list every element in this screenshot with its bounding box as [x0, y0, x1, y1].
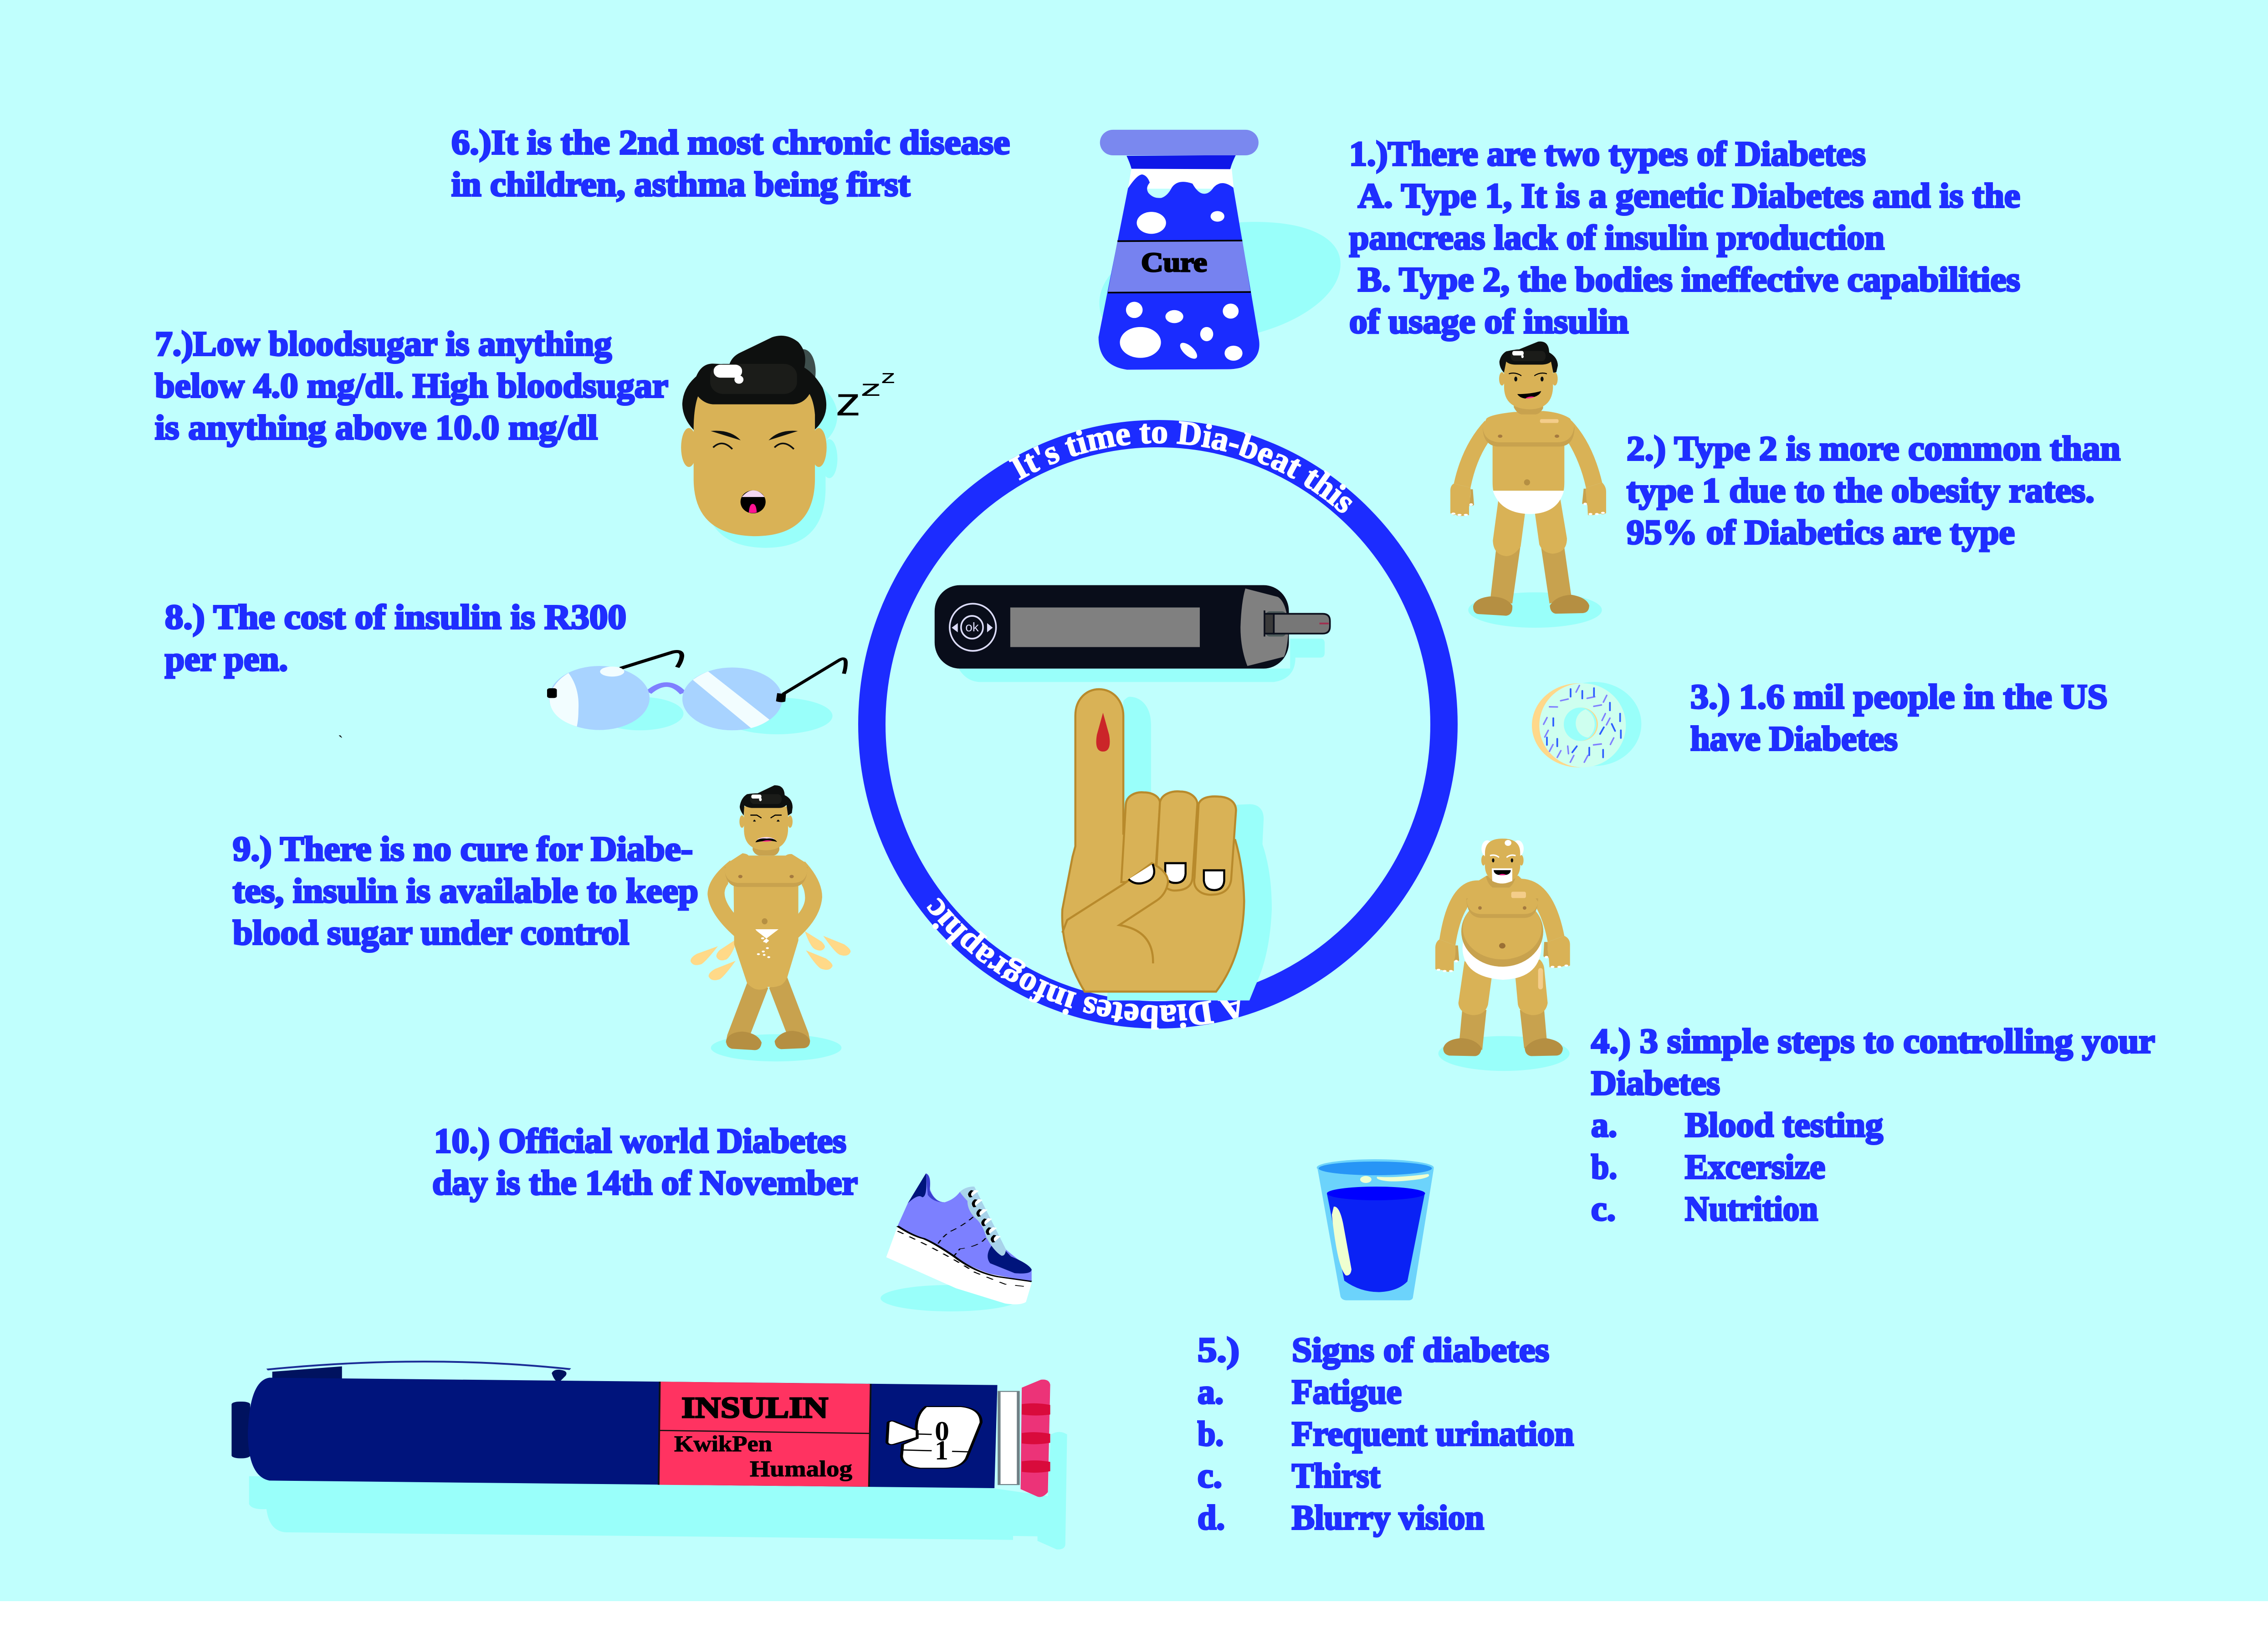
- text 5: signs of diabetes: d.: [1198, 1499, 1225, 1537]
- ring text: top: It's time to Dia-beat this: [1004, 413, 1363, 521]
- text 6: second most chronic disease: 6.)It is the 2nd most chronic disease: [451, 123, 1010, 162]
- text 2: type 2 is more common: type 1 due to the obesity rates.: [1627, 471, 2094, 510]
- text 5: signs of diabetes: c.: [1198, 1457, 1222, 1495]
- text 5: signs of diabetes: a.: [1198, 1373, 1224, 1411]
- text 1: two types of diabetes: 1.)There are two types of Diabetes: [1349, 135, 1866, 173]
- stray mark: `: [338, 733, 343, 750]
- text 1: two types of diabetes: pancreas lack of insulin production: [1349, 219, 1884, 257]
- text 9: no cure: 9.) There is no cure for Diabe-: [233, 830, 693, 868]
- text 6: second most chronic disease: in children, asthma being first: [451, 165, 910, 204]
- figure: man needing to urinate: [691, 785, 850, 1061]
- text 4: three simple steps: a.: [1591, 1106, 1617, 1144]
- label: zzz: z: [881, 366, 896, 387]
- figure: sleepy head: [681, 336, 837, 548]
- text 8: cost of insulin: [165, 598, 626, 678]
- text 4: three simple steps: 4.) 3 simple steps to controlling your: [1591, 1022, 2155, 1060]
- text 9: no cure: blood sugar under control: [233, 914, 629, 952]
- text 4: three simple steps: Excersize: [1685, 1148, 1825, 1186]
- text 6: second most chronic disease: [451, 123, 1010, 204]
- text 10: world diabetes day: [432, 1122, 858, 1202]
- label: zzz: [835, 366, 896, 424]
- text 5: signs of diabetes: Fatigue: [1292, 1373, 1402, 1411]
- pen labels: KwikPen: [674, 1431, 772, 1456]
- text 1: two types of diabetes: A. Type 1, It is a genetic Diabetes and is the: [1358, 177, 2020, 215]
- text 8: cost of insulin: 8.) The cost of insulin is R300: [165, 598, 626, 636]
- text 3: people in the US: 3.) 1.6 mil people in the US: [1690, 678, 2108, 716]
- text 3: people in the US: [1690, 678, 2108, 758]
- text 7: blood sugar levels: 7.)Low bloodsugar is anything: [155, 325, 612, 363]
- ring text: bottom: A Diabetes infographic: [915, 892, 1250, 1035]
- icon: sneaker: [881, 1173, 1032, 1311]
- text 3: people in the US: have Diabetes: [1690, 720, 1898, 758]
- label: zzz: z: [860, 375, 881, 401]
- icon: flask labelled Cure: [1099, 130, 1341, 370]
- text 5: signs of diabetes: Blurry vision: [1292, 1499, 1484, 1537]
- text 7: blood sugar levels: [155, 325, 668, 447]
- icon: doughnut: [1532, 682, 1641, 768]
- pen labels: INSULIN: [681, 1391, 828, 1424]
- text 8: cost of insulin: per pen.: [165, 640, 288, 678]
- text 9: no cure: [233, 830, 698, 952]
- text 5: signs of diabetes: Thirst: [1292, 1457, 1380, 1495]
- text 2: type 2 is more common: [1627, 430, 2120, 552]
- label: ok button: ok: [965, 620, 979, 634]
- icon: hand with blood drop: [1062, 689, 1272, 1000]
- text 1: two types of diabetes: of usage of insulin: [1349, 302, 1628, 341]
- text 4: three simple steps: b.: [1591, 1148, 1617, 1186]
- central ring with curved text: [872, 413, 1444, 1035]
- icon: insulin pen: [231, 1362, 1067, 1550]
- text 1: two types of diabetes: B. Type 2, the bodies ineffective capabilities: [1358, 261, 2020, 299]
- text 4: three simple steps: [1591, 1022, 2155, 1228]
- text 5: signs of diabetes: b.: [1198, 1415, 1224, 1453]
- icon: glucose meter: [935, 585, 1330, 682]
- pen labels: 1: [935, 1435, 948, 1465]
- text 7: blood sugar levels: below 4.0 mg/dl. High bloodsugar: [155, 367, 668, 405]
- text 2: type 2 is more common: 95% of Diabetics are type: [1627, 513, 2015, 552]
- label: Cure: Cure: [1141, 247, 1207, 277]
- pen labels: Humalog: [750, 1456, 852, 1481]
- text 1: two types of diabetes: [1349, 135, 2020, 341]
- text 7: blood sugar levels: is anything above 10.0 mg/dl: [155, 409, 598, 447]
- text 5: signs of diabetes: Signs of diabetes: [1292, 1331, 1549, 1369]
- figure: smiling man: [1450, 342, 1606, 628]
- text 10: world diabetes day: 10.) Official world Diabetes: [434, 1122, 846, 1160]
- label: zzz: z: [835, 379, 861, 424]
- pen labels: 0: [935, 1416, 949, 1446]
- pen labels: [674, 1391, 949, 1481]
- text 5: signs of diabetes: 5.): [1198, 1331, 1239, 1369]
- text 5: signs of diabetes: [1198, 1331, 1574, 1537]
- text 10: world diabetes day: day is the 14th of November: [432, 1164, 858, 1202]
- icon: glass of water: [1317, 1159, 1434, 1300]
- text 4: three simple steps: Diabetes: [1591, 1064, 1720, 1102]
- icon: glasses: [547, 651, 846, 734]
- text 4: three simple steps: Blood testing: [1685, 1106, 1883, 1144]
- text 5: signs of diabetes: Frequent urination: [1292, 1415, 1574, 1453]
- text 4: three simple steps: Nutrition: [1685, 1190, 1818, 1228]
- text 4: three simple steps: c.: [1591, 1190, 1616, 1228]
- text 9: no cure: tes, insulin is available to keep: [233, 872, 698, 910]
- text 2: type 2 is more common: 2.) Type 2 is more common than: [1627, 430, 2120, 468]
- figure: old overweight man: [1435, 839, 1570, 1071]
